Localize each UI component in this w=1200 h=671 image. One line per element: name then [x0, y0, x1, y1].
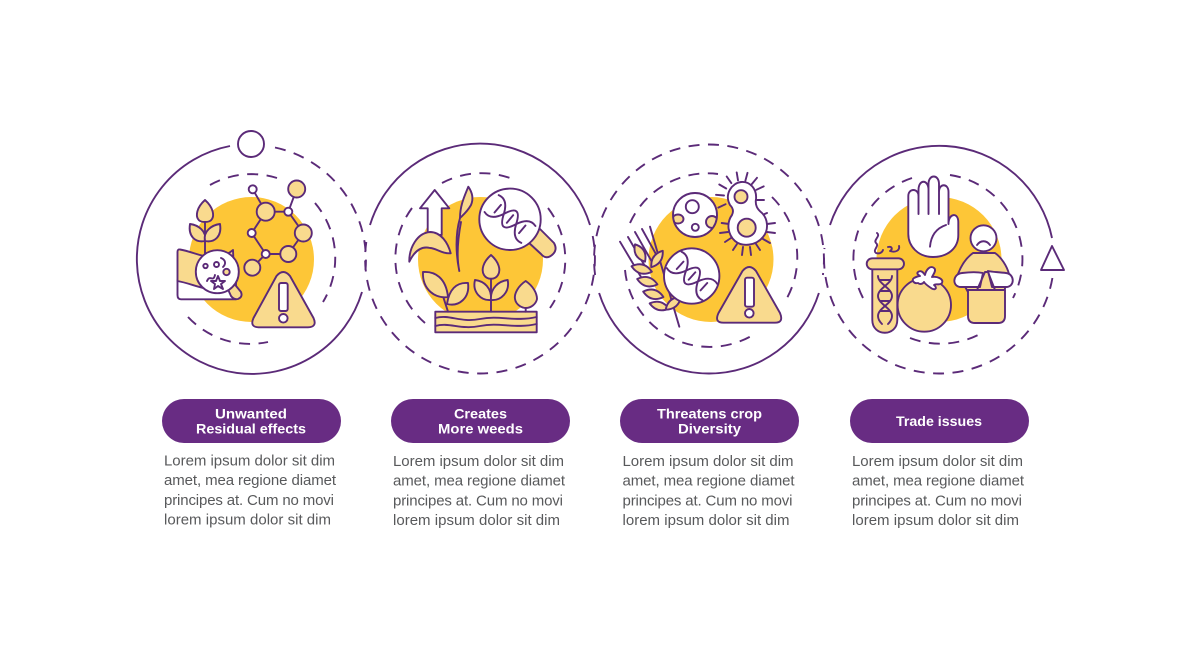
ring: inner dashed ring	[395, 173, 565, 323]
text block: column 4: amet, mea regione diamet	[852, 472, 1025, 490]
text block: column 2: principes at. Cum no movi	[393, 492, 563, 510]
ring: outer ring	[594, 144, 824, 374]
ring: outer ring with end triangle	[824, 146, 1064, 374]
text block: column 2	[393, 453, 566, 529]
text block: column 3: principes at. Cum no movi	[622, 492, 792, 510]
yellow disc	[189, 197, 314, 322]
text block: column 1: principes at. Cum no movi	[164, 492, 334, 509]
yellow disc	[876, 197, 1002, 322]
icon: DNA circle	[664, 248, 719, 304]
text block: column 3: amet, mea regione diamet	[622, 472, 795, 490]
ring: outer ring	[365, 144, 595, 374]
icon: virus cell	[672, 193, 718, 237]
icon: tomato	[898, 267, 951, 332]
heading pill: threatens crop diversity	[620, 399, 799, 443]
icon: warning triangle	[252, 272, 315, 327]
text block: column 4: Lorem ipsum dolor sit dim	[852, 453, 1023, 470]
icon: stop hand	[908, 176, 958, 257]
icon: soil strip	[435, 312, 537, 332]
text block: column 2: Lorem ipsum dolor sit dim	[393, 453, 564, 470]
text block: column 1: lorem ipsum dolor sit dim	[164, 512, 331, 528]
text block: column 1: Lorem ipsum dolor sit dim	[164, 452, 335, 470]
text block: column 2: amet, mea regione diamet	[393, 472, 566, 490]
heading pill: threatens crop diversity: Threatens crop	[657, 406, 762, 422]
heading pill: creates more weeds: More weeds	[438, 420, 523, 436]
heading pill: trade issues	[850, 399, 1029, 443]
text block: column 4	[852, 453, 1025, 529]
text block: column 4: lorem ipsum dolor sit dim	[852, 512, 1019, 529]
yellow disc	[418, 197, 543, 322]
icon: tall weed	[457, 187, 472, 271]
heading pill: unwanted residual effects: Residual effects	[196, 420, 306, 436]
icon: bacteria	[716, 172, 775, 255]
panel: creates more weeds	[365, 144, 595, 374]
text block: column 2: lorem ipsum dolor sit dim	[393, 512, 560, 529]
icon: sad person with bag	[954, 225, 1013, 323]
text block: column 1: amet, mea regione diamet	[164, 472, 337, 489]
heading pill: unwanted residual effects	[162, 399, 341, 443]
ring: inner dashed ring	[625, 173, 797, 347]
heading pill: unwanted residual effects: Unwanted	[215, 406, 287, 422]
text block: column 4: principes at. Cum no movi	[852, 492, 1022, 510]
icon: upward arrow	[420, 190, 449, 235]
ring: outer ring with start circle	[137, 131, 366, 374]
ring: inner dashed ring	[853, 175, 1022, 344]
icon: sprouts	[423, 255, 537, 312]
panel: unwanted residual effects	[137, 131, 366, 374]
icon: wilted leaf	[409, 232, 451, 262]
ring: inner dashed ring	[188, 174, 335, 344]
text block: column 3	[622, 453, 795, 529]
heading pill: threatens crop diversity: Diversity	[678, 420, 741, 436]
panel: trade issues	[824, 146, 1064, 374]
icon: wheat ear	[620, 227, 684, 327]
icon: plant and soil under magnifier	[178, 200, 242, 299]
heading pill: creates more weeds	[391, 399, 570, 443]
text block: column 3: Lorem ipsum dolor sit dim	[622, 453, 794, 470]
icon: warning triangle	[717, 267, 781, 323]
text block: column 1	[164, 452, 337, 528]
icon: test tube with DNA	[867, 233, 904, 333]
icon: magnifier with DNA	[479, 189, 556, 257]
heading pill: trade issues: Trade issues	[896, 413, 982, 429]
text block: column 3: lorem ipsum dolor sit dim	[622, 512, 790, 529]
panel: threatens crop diversity	[594, 144, 824, 374]
yellow disc	[648, 197, 774, 322]
icon: molecule	[244, 180, 312, 276]
heading pill: creates more weeds: Creates	[454, 406, 507, 422]
